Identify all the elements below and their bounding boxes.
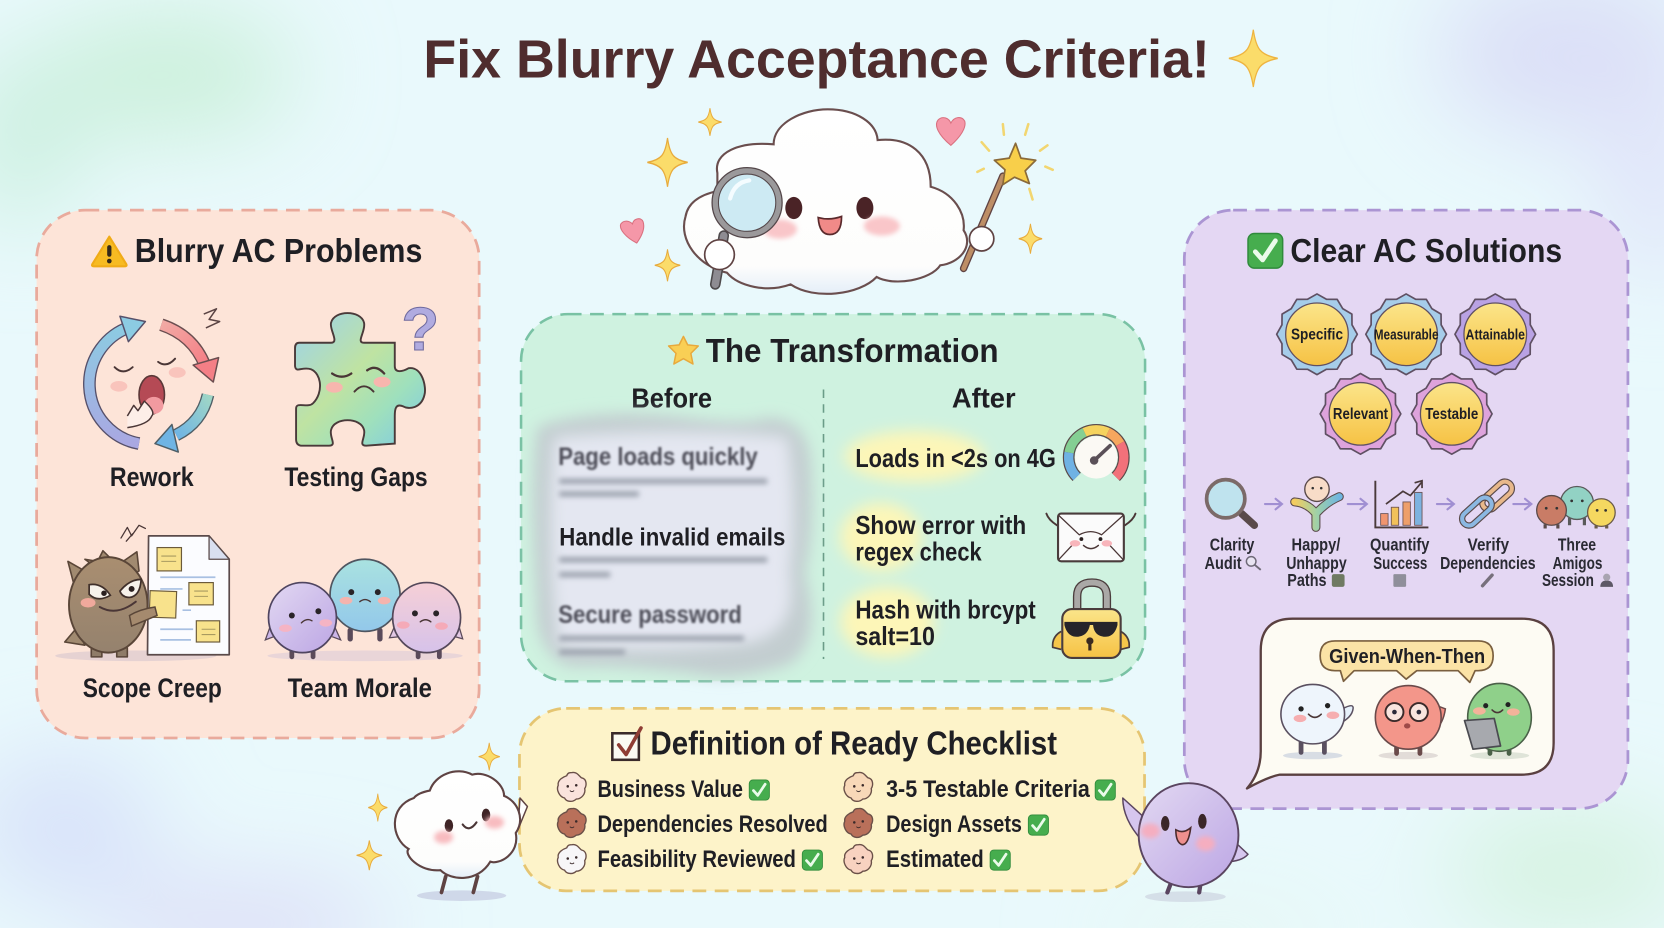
tag: given-when-then	[1320, 641, 1493, 682]
panel: the transformation	[521, 314, 1145, 681]
process: quantify success	[1370, 481, 1430, 587]
heading: Clear AC Solutions	[1290, 232, 1562, 269]
badge: measurable	[1366, 294, 1446, 375]
icon: lock with sunglasses	[1053, 583, 1129, 658]
badge: specific: Specific	[1291, 327, 1343, 344]
mascot: small white cloud	[357, 743, 527, 901]
icon: scope creep monster and document	[55, 525, 229, 661]
icon: star	[669, 336, 698, 364]
after item 1: Loads in <2s on 4G	[855, 443, 1056, 473]
process: verify dependencies: Verify	[1468, 535, 1509, 555]
process: three amigos session	[1537, 487, 1615, 590]
after item 2 line 2: regex check	[855, 536, 982, 566]
icon: title sparkle	[1229, 30, 1278, 87]
heading: Blurry AC Problems	[135, 232, 422, 269]
before column: blurred criteria	[533, 414, 812, 677]
checklist item: dependencies resolved	[558, 808, 828, 838]
process: clarity audit	[1204, 480, 1261, 573]
process: three amigos session: Three	[1558, 535, 1596, 555]
after column: clear criteria	[840, 430, 1136, 658]
before item 3: Secure password	[558, 601, 742, 629]
icon: sparkles and hearts around cloud	[620, 108, 1042, 281]
process: verify dependencies	[1440, 479, 1536, 586]
before item 2: Handle invalid emails	[559, 523, 785, 551]
character: white blob	[1281, 684, 1353, 759]
icon: warning triangle	[92, 237, 127, 266]
checklist item: estimated: Estimated	[886, 846, 984, 873]
process: happy unhappy paths: Paths	[1287, 570, 1327, 590]
badge: relevant: Relevant	[1333, 406, 1388, 423]
panel: clear AC solutions	[1184, 210, 1628, 809]
process: happy unhappy paths: Unhappy	[1286, 553, 1347, 573]
mascot: purple blob	[1123, 783, 1248, 902]
icon: chain links	[1459, 479, 1515, 528]
process: clarity audit: Clarity	[1210, 535, 1255, 555]
badge: testable: Testable	[1425, 406, 1479, 423]
tag: given-when-then: Given-When-Then	[1329, 645, 1485, 668]
icon: checkbox	[612, 728, 641, 760]
process: verify dependencies: Dependencies	[1440, 553, 1536, 573]
before item 1: Page loads quickly	[558, 443, 758, 471]
title: Fix Blurry Acceptance Criteria!	[423, 29, 1210, 89]
checklist item: estimated	[844, 845, 1010, 873]
icon: magic wand	[964, 124, 1053, 268]
icon: green check	[1248, 233, 1283, 268]
icon: magnifier	[1207, 480, 1254, 525]
after item 3: Hash with brcypt	[855, 595, 1036, 625]
arrow	[1513, 499, 1531, 509]
checklist item: business value: Business Value	[597, 776, 743, 803]
checklist item: design assets: Design Assets	[886, 811, 1022, 838]
column heading: after: After	[952, 382, 1016, 413]
icon: question mark: ?	[401, 295, 439, 364]
badge: testable	[1411, 374, 1492, 454]
label: testing gaps: Testing Gaps	[284, 462, 428, 492]
arrow	[1348, 499, 1367, 509]
process: quantify success: Quantify	[1370, 535, 1430, 555]
badge: relevant	[1320, 374, 1401, 454]
panel: definition of ready checklist	[519, 708, 1145, 891]
label: team morale: Team Morale	[288, 673, 432, 703]
cloud face	[763, 197, 900, 239]
process: clarity audit: Audit	[1204, 553, 1242, 573]
heading: Definition of Ready Checklist	[651, 724, 1057, 761]
after item 2: Show error with	[855, 510, 1026, 540]
icon: sad team blobs	[265, 559, 463, 661]
column heading: before: Before	[631, 382, 712, 413]
icon: magnifying glass	[705, 168, 782, 284]
panel: blurry AC problems	[37, 210, 479, 738]
cloud body	[684, 109, 967, 294]
label: rework: Rework	[110, 462, 194, 492]
process: happy unhappy paths	[1286, 477, 1347, 590]
process: three amigos session: Amigos	[1553, 553, 1603, 573]
checklist item: dependencies resolved: Dependencies Resolved	[597, 811, 828, 838]
process: quantify success: Success	[1373, 553, 1428, 573]
mascot: cloud with magnifier and wand	[620, 108, 1053, 294]
badge: attainable: Attainable	[1466, 328, 1525, 344]
arrow	[1437, 499, 1454, 509]
process: three amigos session: Session	[1542, 570, 1594, 590]
badge: attainable	[1455, 294, 1536, 375]
icon: rework cycle	[89, 309, 220, 452]
arrow	[1265, 499, 1282, 509]
label: scope creep: Scope Creep	[83, 673, 222, 703]
character: green blob with tablet	[1464, 683, 1531, 759]
icon: three small blobs	[1537, 487, 1615, 528]
after item 3 line 2: salt=10	[855, 621, 935, 651]
icon: forked path	[1295, 477, 1339, 527]
icon: speed gauge	[1069, 430, 1124, 479]
character: red blob with glasses	[1375, 686, 1445, 759]
checklist item: feasibility reviewed: Feasibility Reviewed	[597, 846, 796, 873]
checklist item: business value	[558, 772, 769, 803]
badge: specific	[1277, 294, 1357, 375]
speech bubble: given when then	[1247, 619, 1554, 788]
icon: bar chart	[1375, 481, 1428, 527]
badge: measurable: Measurable	[1374, 328, 1439, 344]
process: happy unhappy paths: Happy/	[1292, 535, 1340, 555]
checklist item: testable criteria: 3-5 Testable Criteria	[886, 776, 1090, 803]
heading: The Transformation	[706, 332, 999, 369]
icon: sad puzzle piece	[295, 295, 439, 446]
icon: smiling envelope	[1046, 514, 1136, 561]
